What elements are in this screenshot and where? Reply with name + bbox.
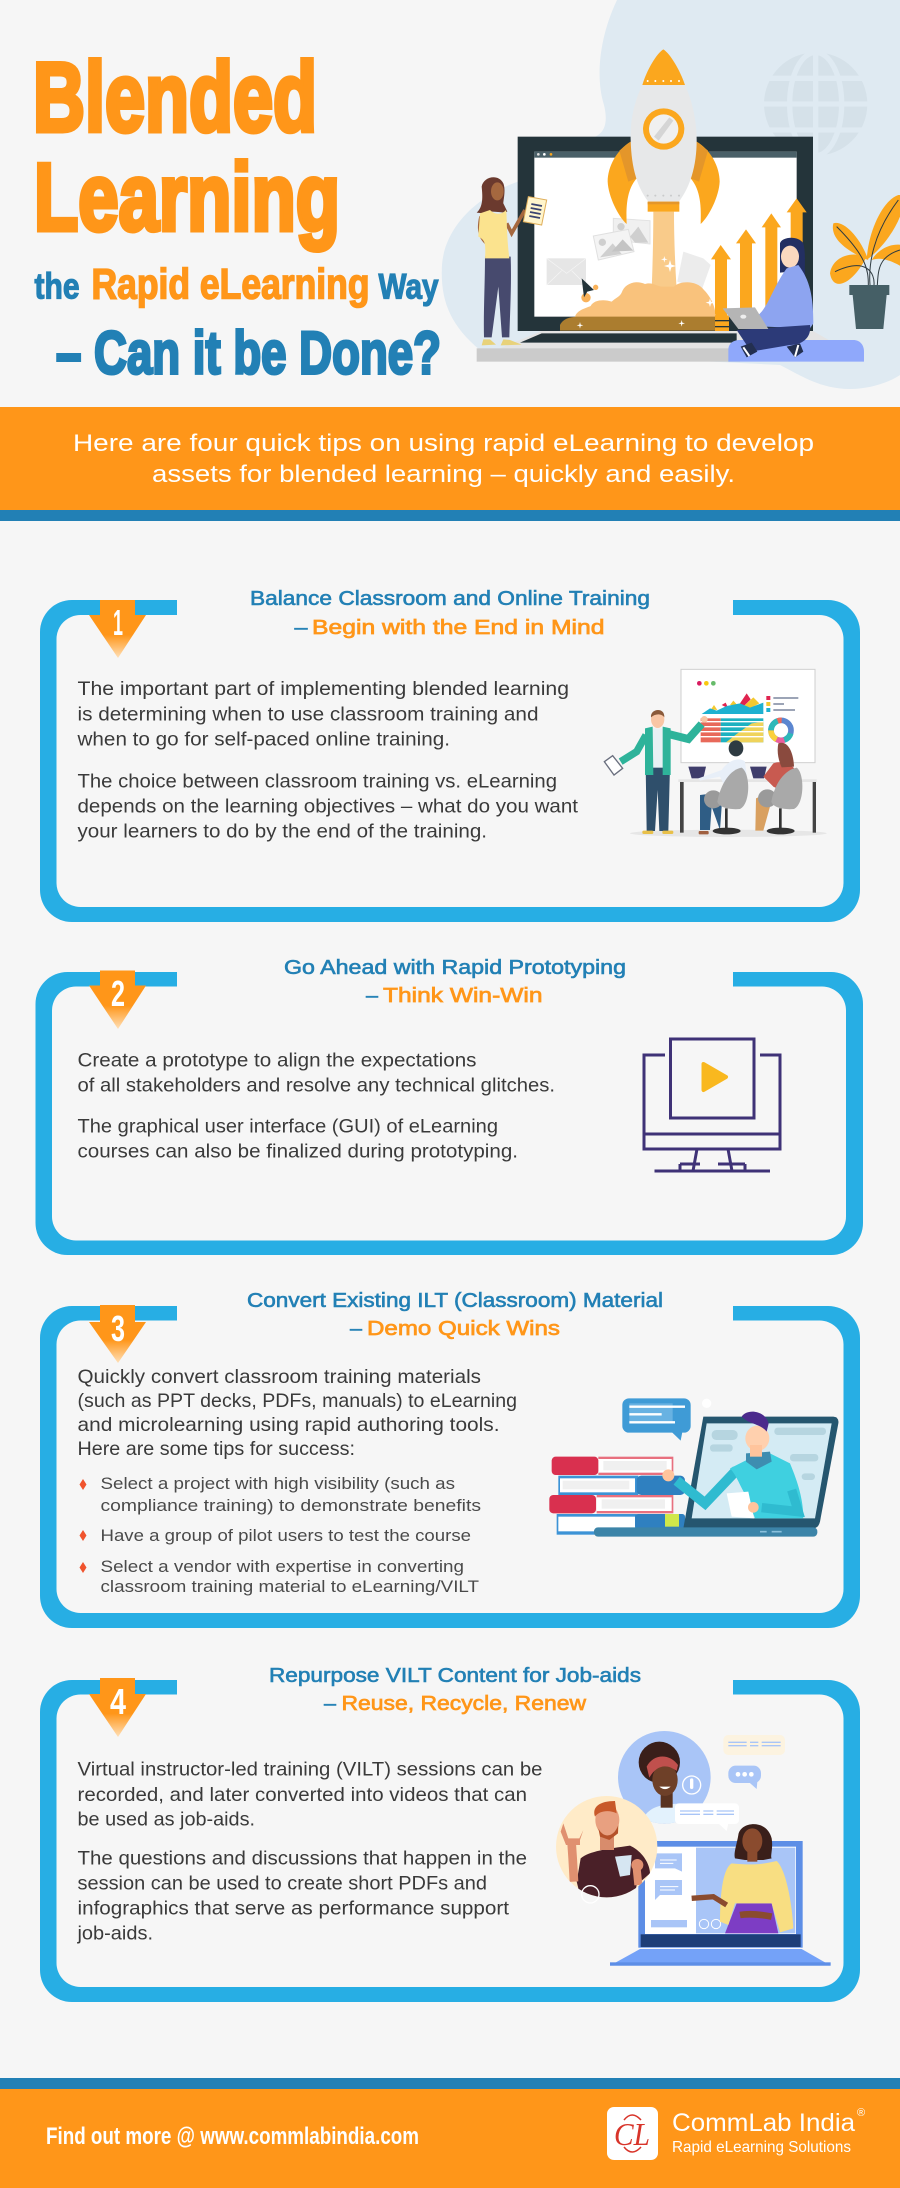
badge 2: 2 xyxy=(111,973,125,1014)
bullet list: Select a vendor with expertise in converting xyxy=(100,1558,464,1576)
text block 3: Here are some tips for success: xyxy=(78,1438,355,1460)
icon: globe xyxy=(762,50,870,158)
logo: CL xyxy=(614,2116,650,2152)
text block 3: (such as PPT decks, PDFs, manuals) to eLearning xyxy=(78,1390,517,1412)
panel: tip 4 xyxy=(40,1665,860,2002)
badge 4 xyxy=(89,1678,146,1737)
badge 3: 3 xyxy=(111,1308,125,1349)
plant xyxy=(830,195,900,329)
heading 3 xyxy=(247,1290,663,1340)
title: – Can it be Done? xyxy=(56,320,441,386)
exhaust xyxy=(560,212,729,331)
heading 3: – xyxy=(350,1318,363,1340)
heading 4: Repurpose VILT Content for Job-aids xyxy=(269,1665,641,1687)
woman with tablet xyxy=(477,177,547,345)
bullet list: Select a project with high visibility (such as xyxy=(100,1475,455,1493)
title: Rapid eLearning xyxy=(92,260,370,308)
icon: images, envelope and document xyxy=(547,218,711,290)
title: Way xyxy=(378,268,439,306)
badge 1 xyxy=(89,600,146,658)
text block 4: recorded, and later converted into videos that can xyxy=(78,1784,527,1806)
heading 1: Begin with the End in Mind xyxy=(312,617,604,639)
intro banner: assets for blended learning – quickly and easily. xyxy=(152,461,735,488)
illustration: classroom presentation xyxy=(604,669,827,837)
icon: cursor xyxy=(581,278,598,302)
heading 3: Convert Existing ILT (Classroom) Material xyxy=(247,1290,663,1312)
heading 3: Demo Quick Wins xyxy=(367,1318,560,1340)
bullet list: classroom training material to eLearning/VILT xyxy=(100,1578,479,1596)
text block 2 xyxy=(78,1050,555,1163)
chat bubbles xyxy=(675,1735,785,1831)
text block 1: is determining when to use classroom training and xyxy=(78,704,538,726)
laptop xyxy=(594,1417,838,1537)
text block 1: when to go for self-paced online training. xyxy=(76,729,450,751)
badge 1: 1 xyxy=(113,602,123,643)
text block 3: and microlearning using rapid authoring tools. xyxy=(78,1414,500,1436)
presenter xyxy=(604,710,708,834)
speech bubble xyxy=(622,1398,711,1441)
logo xyxy=(607,2107,865,2160)
books xyxy=(549,1457,685,1535)
intro banner: Here are four quick tips on using rapid eLearning to develop xyxy=(73,430,814,457)
text block 4: be used as job-aids. xyxy=(78,1809,255,1831)
text block 4: infographics that serve as performance support xyxy=(78,1897,510,1919)
text block 4: The questions and discussions that happen in the xyxy=(78,1847,527,1869)
panel: tip 3 xyxy=(40,1290,860,1628)
footer xyxy=(0,2078,900,2188)
background blob xyxy=(442,0,900,389)
seated person 1 xyxy=(698,740,748,834)
heading 2 xyxy=(284,957,626,1007)
table xyxy=(678,767,817,833)
heading 2: Think Win-Win xyxy=(383,985,542,1007)
illustration: books and laptop instructor xyxy=(549,1398,838,1537)
seated person 2 xyxy=(755,743,802,834)
title: Blended xyxy=(33,42,317,152)
laptop monitor xyxy=(477,137,843,362)
text block 1: your learners to do by the end of the training. xyxy=(78,821,487,843)
text block 4: job-aids. xyxy=(76,1922,153,1944)
badge 2 xyxy=(89,970,146,1029)
woman presenter xyxy=(692,1824,793,1933)
bullet list xyxy=(80,1475,481,1596)
text block 2: Create a prototype to align the expectations xyxy=(78,1050,477,1072)
heading 4 xyxy=(269,1665,641,1715)
heading 4: Reuse, Recycle, Renew xyxy=(342,1693,587,1715)
text block 1: The important part of implementing blended learning xyxy=(78,678,569,700)
illustration: virtual session xyxy=(556,1731,831,1966)
text block 4: session can be used to create short PDFs and xyxy=(78,1873,487,1895)
text block 3: Quickly convert classroom training materials xyxy=(78,1366,481,1388)
logo: ® xyxy=(857,2107,865,2119)
icon: video monitor xyxy=(644,1039,780,1171)
badge 4: 4 xyxy=(110,1681,126,1722)
logo: Rapid eLearning Solutions xyxy=(672,2139,851,2156)
heading 1: Balance Classroom and Online Training xyxy=(250,588,650,610)
text block 1: depends on the learning objectives – what do you want xyxy=(78,796,579,818)
text block 4 xyxy=(76,1759,543,1944)
title xyxy=(33,42,441,386)
whiteboard chart xyxy=(681,669,815,763)
badge 3 xyxy=(89,1305,146,1363)
instructor xyxy=(662,1412,803,1518)
text block 1 xyxy=(76,678,579,843)
bullet list: compliance training) to demonstrate benefits xyxy=(100,1497,481,1515)
heading 2: Go Ahead with Rapid Prototyping xyxy=(284,957,626,979)
bullet list: Have a group of pilot users to test the course xyxy=(100,1527,471,1545)
hero illustration xyxy=(477,49,900,362)
logo: CommLab India xyxy=(672,2109,855,2137)
text block 4: Virtual instructor-led training (VILT) sessions can be xyxy=(78,1759,542,1781)
rocket xyxy=(608,49,720,224)
intro banner xyxy=(0,407,900,521)
text block 2: of all stakeholders and resolve any technical glitches. xyxy=(78,1075,555,1097)
blue circle with woman xyxy=(618,1731,711,1824)
heading 2: – xyxy=(366,985,379,1007)
panel: tip 1 xyxy=(40,588,860,922)
title: the xyxy=(34,266,80,306)
panel: tip 2 xyxy=(36,957,863,1255)
person with laptop xyxy=(723,238,864,362)
footer link: Find out more @ www.commlabindia.com xyxy=(46,2123,419,2150)
laptop xyxy=(610,1841,831,1966)
text block 2: courses can also be finalized during prototyping. xyxy=(78,1141,518,1163)
heading 1: – xyxy=(294,617,309,639)
heading 4: – xyxy=(324,1693,337,1715)
heading 1 xyxy=(250,588,650,639)
arrows xyxy=(711,198,807,317)
title: Learning xyxy=(34,144,340,251)
text block 3 xyxy=(78,1366,517,1460)
peach circle with man xyxy=(556,1796,657,1903)
text block 2: The graphical user interface (GUI) of eLearning xyxy=(78,1116,498,1138)
text block 1: The choice between classroom training vs. eLearning xyxy=(78,770,557,792)
